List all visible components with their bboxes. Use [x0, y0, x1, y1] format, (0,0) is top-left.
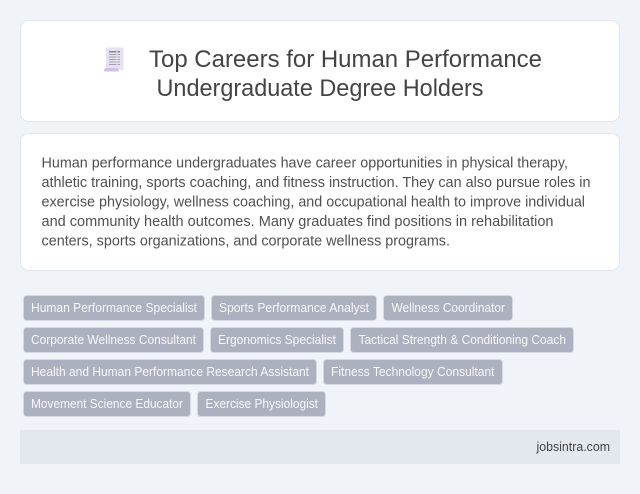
tag: Health and Human Performance Research Assistant: Health and Human Performance Research Assistant	[31, 365, 309, 379]
tag: Corporate Wellness Consultant: Corporate Wellness Consultant	[31, 333, 196, 347]
text block: description: and community health outcomes. Many graduates find positions in rehabilitation	[42, 214, 554, 230]
icon: document scroll	[104, 47, 124, 72]
tag: Exercise Physiologist	[198, 392, 326, 416]
text block: description: athletic training, sports coaching, and fitness instruction. They can also pursue roles in	[42, 175, 590, 191]
tag: Movement Science Educator: Movement Science Educator	[31, 397, 183, 411]
tag: Health and Human Performance Research Assistant	[24, 360, 316, 384]
panel: description card	[20, 134, 620, 270]
tag: Fitness Technology Consultant: Fitness Technology Consultant	[331, 365, 495, 379]
tag: Sports Performance Analyst: Sports Performance Analyst	[219, 301, 370, 315]
title: Undergraduate Degree Holders	[156, 75, 484, 102]
text block: description	[42, 156, 590, 250]
tag: Movement Science Educator	[24, 392, 190, 416]
text block: description: centers, sports organizations, and corporate wellness programs.	[42, 234, 450, 250]
tag: Human Performance Specialist: Human Performance Specialist	[31, 301, 198, 315]
panel: header card	[20, 20, 620, 122]
tag: Exercise Physiologist: Exercise Physiologist	[206, 397, 318, 411]
text block: description: exercise physiology, wellness coaching, and occupational health to improve individual	[42, 195, 585, 211]
tag: Ergonomics Specialist	[210, 328, 344, 352]
panel: career tags	[24, 296, 574, 416]
tag: Ergonomics Specialist: Ergonomics Specialist	[218, 333, 337, 347]
tag: Wellness Coordinator: Wellness Coordinator	[392, 301, 505, 315]
tag: Tactical Strength & Conditioning Coach: Tactical Strength & Conditioning Coach	[358, 333, 566, 347]
tag: Fitness Technology Consultant	[324, 360, 502, 384]
tag: Sports Performance Analyst	[212, 296, 376, 320]
tag: Human Performance Specialist	[24, 296, 204, 320]
tag: Corporate Wellness Consultant	[24, 328, 204, 352]
footer source text: jobsintra.com	[536, 440, 610, 454]
tag: Wellness Coordinator	[384, 296, 512, 320]
footer	[20, 430, 620, 464]
title	[149, 46, 542, 102]
tag: Tactical Strength & Conditioning Coach	[350, 328, 574, 352]
text block: description: Human performance undergraduates have career opportunities in physical therapy,	[42, 156, 568, 172]
title: Top Careers for Human Performance	[149, 46, 542, 73]
